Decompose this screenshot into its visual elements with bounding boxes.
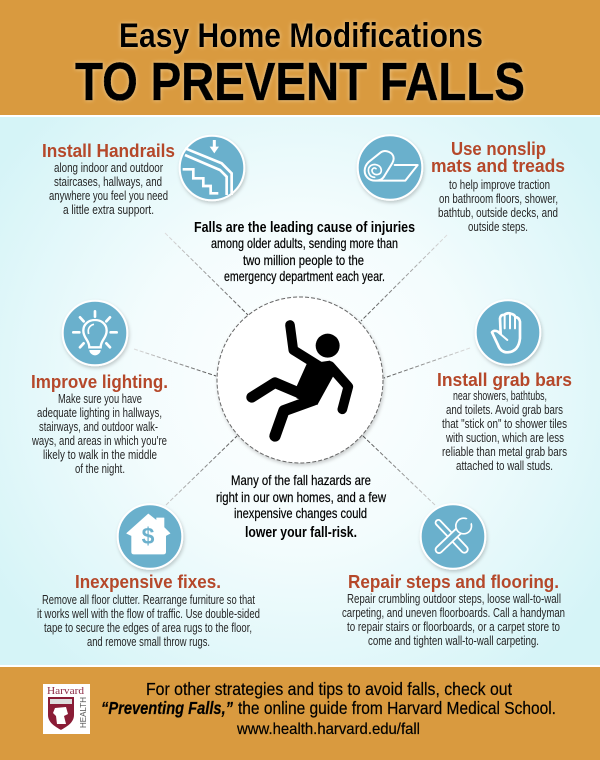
panel: install handrails: staircases, hallways, and (54, 174, 162, 189)
panel: nonslip mats: bathtub, outside decks, and (438, 205, 558, 220)
text block: intro: emergency department each year. (224, 268, 385, 284)
logo: Harvard Health (43, 684, 90, 734)
text block: hazards: lower your fall-risk. (245, 524, 357, 541)
text block: hazards (216, 472, 387, 541)
icon: rolled mat (358, 135, 422, 200)
panel: main content background (0, 117, 600, 665)
panel: nonslip mats: outside steps. (468, 219, 528, 234)
title: Easy Home Modifications (119, 17, 483, 55)
panel: improve lighting: stairways, and outdoor walk- (39, 419, 158, 434)
panel: grab bars: with suction, which are less (445, 430, 564, 445)
text block: hazards: Many of the fall hazards are (231, 472, 371, 488)
panel: install handrails: Install Handrails (42, 141, 175, 161)
panel: inexpensive fixes: and remove small throw rugs. (87, 634, 210, 649)
text block: footer call to action: “Preventing Falls,” (101, 698, 233, 718)
panel: improve lighting: adequate lighting in hallways, (37, 405, 162, 420)
panel: inexpensive fixes (37, 572, 260, 649)
text block: intro: Falls are the leading cause of injuries (194, 219, 415, 236)
panel: nonslip mats: mats and treads (431, 156, 565, 176)
text block: footer call to action: www.health.harvard.edu/fall (236, 721, 420, 738)
icon: house with dollar sign (118, 504, 182, 569)
icon: wrench and screwdriver (421, 504, 485, 569)
panel: improve lighting: Make sure you have (58, 391, 142, 406)
text block: footer call to action (101, 679, 556, 738)
panel: grab bars (437, 370, 572, 473)
connector lines (134, 233, 470, 505)
icon: hand (476, 300, 540, 365)
text block: hazards: right in our own homes, and a few (216, 489, 387, 505)
text block: hazards: inexpensive changes could (234, 505, 367, 521)
panel: improve lighting: ways, and areas in which you're (31, 433, 167, 448)
panel: nonslip mats (431, 139, 565, 234)
panel: install handrails (42, 141, 175, 217)
logo: Harvard Health: Harvard (47, 685, 85, 697)
panel: inexpensive fixes: it works well with the flow of traffic. Use double-sided (37, 606, 260, 621)
panel: inexpensive fixes: tape to secure the edges of area rugs to the floor, (44, 620, 252, 635)
title (75, 17, 525, 112)
panel: nonslip mats: Use nonslip (451, 139, 546, 159)
panel: improve lighting: likely to walk in the middle (43, 447, 157, 462)
panel: inexpensive fixes: Inexpensive fixes. (75, 572, 221, 592)
panel: improve lighting (31, 372, 168, 476)
logo: Harvard Health: HEALTH (79, 697, 88, 728)
panel: grab bars: and toilets. Avoid grab bars (446, 402, 563, 417)
panel: nonslip mats: on bathroom floors, shower, (439, 191, 558, 206)
panel: install handrails: anywhere you feel you need (49, 188, 168, 203)
panel: repair steps: Repair steps and flooring. (348, 572, 559, 592)
text block: footer call to action: the online guide from Harvard Medical School. (238, 698, 556, 718)
central circle with falling figure (217, 297, 383, 463)
panel: install handrails: along indoor and outdoor (54, 160, 164, 175)
panel: nonslip mats: to help improve traction (449, 177, 550, 192)
panel: install handrails: a little extra support. (63, 202, 154, 217)
text block: footer call to action: For other strategies and tips to avoid falls, check out (146, 679, 512, 699)
title: TO PREVENT FALLS (75, 52, 525, 112)
panel: footer band (0, 667, 600, 760)
panel: repair steps: come and tighten wall-to-wall carpeting. (368, 633, 539, 648)
panel: improve lighting: of the night. (75, 461, 125, 476)
panel: grab bars: attached to wall studs. (456, 458, 553, 473)
panel: improve lighting: Improve lighting. (31, 372, 168, 392)
text block: intro (194, 219, 415, 284)
icon: house with dollar sign: $ (142, 523, 155, 549)
panel: header band (0, 0, 600, 115)
panel: grab bars: near showers, bathtubs, (453, 388, 547, 403)
text block: intro: two million people to the (243, 252, 364, 268)
icon: falling person (252, 325, 348, 436)
panel: repair steps (342, 572, 565, 648)
icon: handrail and stairs (180, 136, 244, 200)
icon: light bulb (63, 301, 127, 365)
panel: inexpensive fixes: Remove all floor clutter. Rearrange furniture so that (42, 592, 255, 607)
panel: grab bars: Install grab bars (437, 370, 572, 390)
text block: intro: among older adults, sending more than (211, 235, 398, 251)
